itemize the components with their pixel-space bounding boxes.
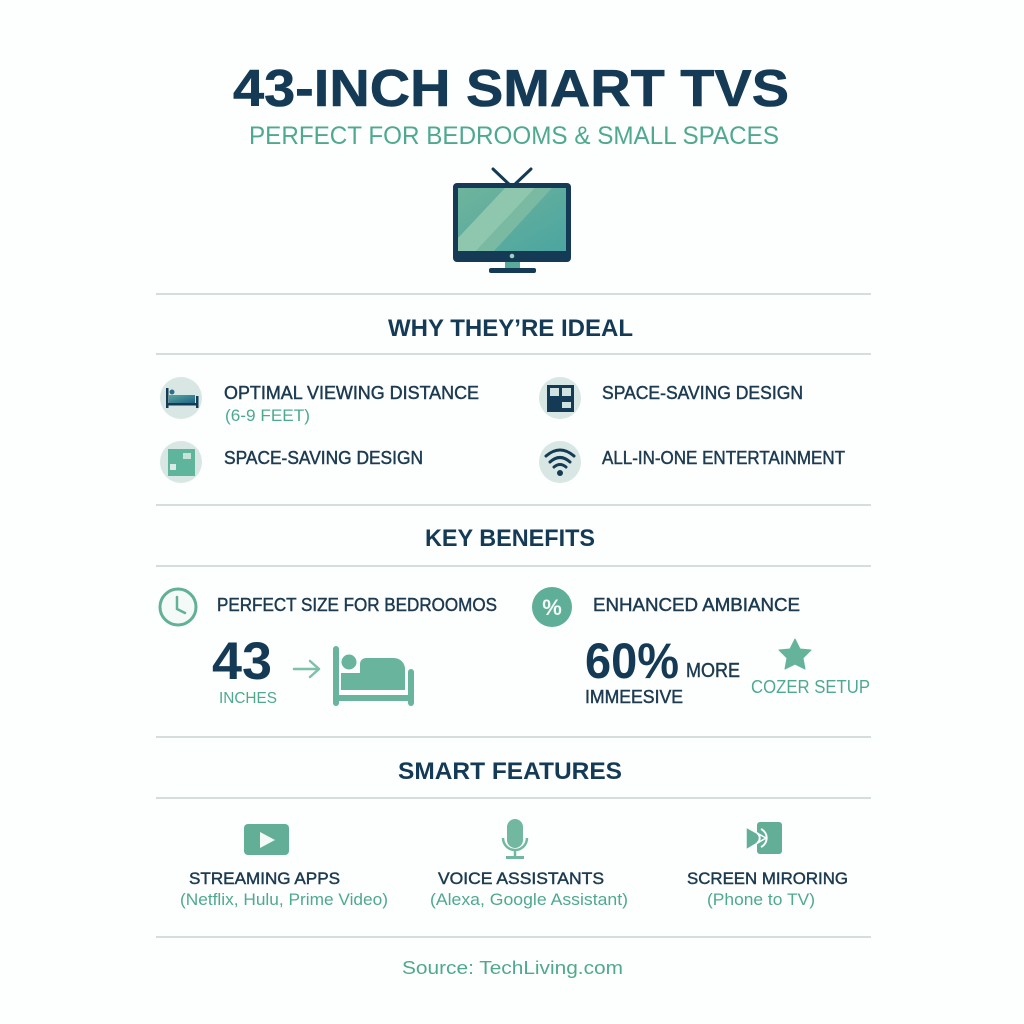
title: 43-INCH SMART TVS [233, 60, 789, 118]
feature: screen mirroring: SCREEN MIRORING [687, 869, 848, 888]
icon: clock [160, 589, 196, 625]
benefit: perfect size for bedrooms: INCHES [219, 690, 277, 707]
icon: percent badge: % [542, 595, 562, 620]
icon: navy layout [539, 377, 581, 419]
icon: bed [160, 377, 202, 419]
feature: voice assistants: VOICE ASSISTANTS [438, 869, 604, 888]
stat: 60% more immersive: 60% [585, 633, 679, 689]
benefit: perfect size for bedrooms: PERFECT SIZE FOR BEDROOMOS [217, 595, 497, 615]
heading: why they're ideal: WHY THEY’RE IDEAL [388, 315, 633, 342]
heading: key benefits: KEY BENEFITS [425, 525, 595, 552]
item: all-in-one entertainment [539, 441, 845, 483]
item: optimal viewing distance [160, 377, 479, 425]
icon: green layout [160, 441, 202, 483]
heading: smart features: SMART FEATURES [398, 758, 622, 785]
icon: microphone [503, 819, 527, 859]
item: all-in-one entertainment: ALL-IN-ONE ENTERTAINMENT [602, 448, 845, 468]
arrow [294, 661, 319, 677]
feature: voice assistants [430, 819, 628, 909]
benefit: enhanced ambiance: IMMEESIVE [585, 687, 683, 707]
benefit: perfect size for bedrooms [160, 589, 497, 707]
item: optimal viewing distance: (6-9 FEET) [225, 406, 310, 425]
benefit: enhanced ambiance: ENHANCED AMBIANCE [593, 595, 800, 615]
feature: streaming apps [180, 824, 388, 909]
item: optimal viewing distance: OPTIMAL VIEWING DISTANCE [224, 383, 479, 403]
icon: bed large [333, 646, 414, 706]
stat: 43 inches: 43 [212, 632, 272, 691]
label: cozier setup: COZER SETUP [751, 677, 870, 697]
subtitle: PERFECT FOR BEDROOMS & SMALL SPACES [249, 122, 779, 150]
icon: screen mirroring [746, 822, 782, 854]
icon: wifi [539, 441, 581, 483]
feature: voice assistants: (Alexa, Google Assistant) [430, 890, 628, 909]
feature: screen mirroring [687, 822, 848, 909]
feature: streaming apps: (Netflix, Hulu, Prime Video) [180, 890, 388, 909]
source: Source: TechLiving.com [402, 958, 623, 978]
feature: screen mirroring: (Phone to TV) [707, 890, 815, 909]
icon: play [244, 824, 289, 855]
icon: star [779, 639, 811, 669]
benefit: enhanced ambiance: MORE [686, 660, 740, 682]
feature: streaming apps: STREAMING APPS [189, 869, 340, 888]
item: space-saving design left [160, 441, 423, 483]
benefit: enhanced ambiance [532, 587, 870, 707]
item: space-saving design right: SPACE-SAVING DESIGN [602, 383, 803, 403]
icon: percent badge [532, 587, 572, 627]
item: space-saving design right [539, 377, 803, 419]
icon: television [453, 169, 571, 273]
item: space-saving design left: SPACE-SAVING DESIGN [224, 448, 423, 468]
